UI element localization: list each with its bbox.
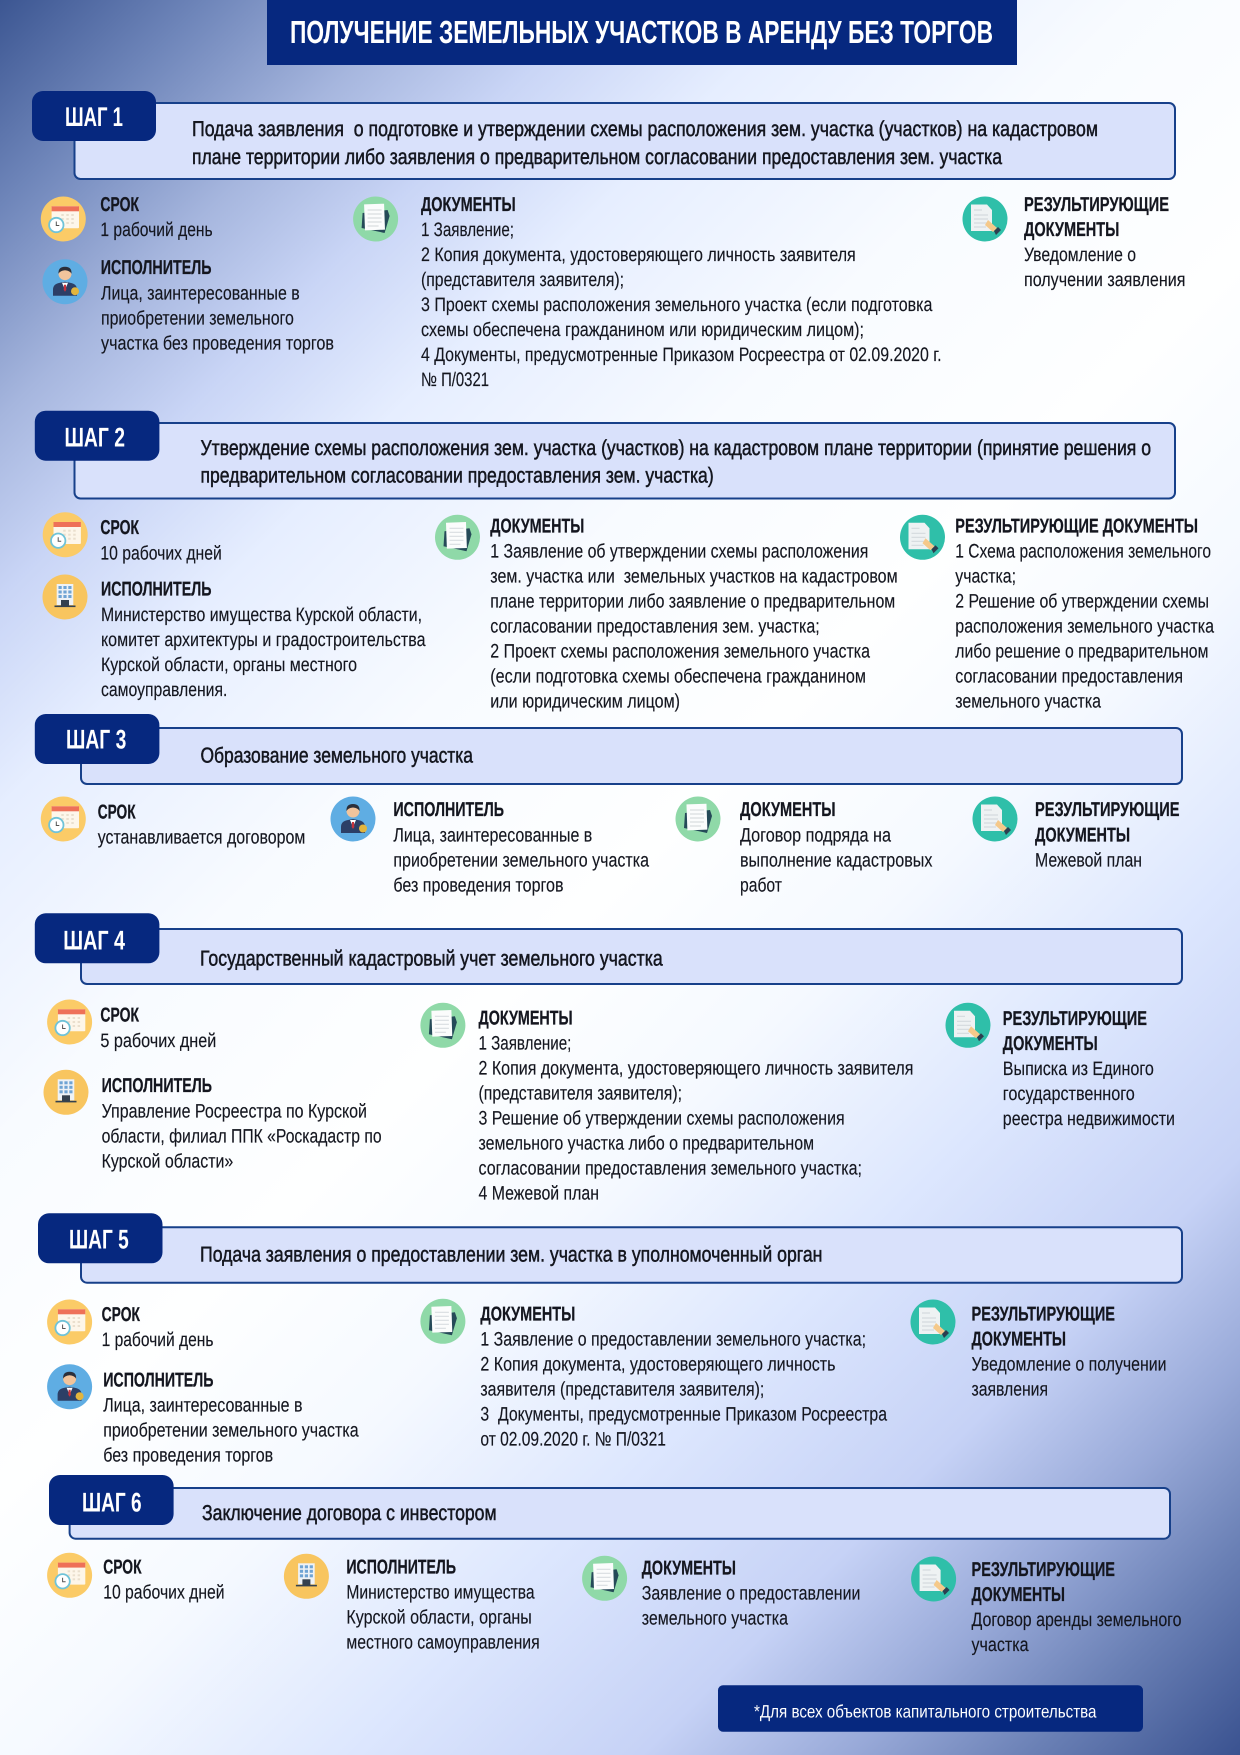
- documents list: зем. участка или земельных участков на кадастровом: [490, 566, 898, 588]
- term heading: СРОК: [103, 1556, 142, 1578]
- resulting heading: РЕЗУЛЬТИРУЮЩИЕ: [1003, 1008, 1147, 1030]
- resulting text: Договор аренды земельного: [972, 1609, 1182, 1631]
- executor text: [393, 825, 649, 897]
- executor text: без проведения торгов: [103, 1445, 273, 1467]
- icon: building: [42, 574, 88, 620]
- documents list: (если подготовка схемы обеспечена гражданином: [490, 666, 866, 688]
- panel: step 2: [35, 411, 1214, 713]
- step 5 bar: [81, 1227, 1182, 1283]
- resulting heading: ДОКУМЕНТЫ: [1024, 219, 1119, 241]
- documents list: 2 Проект схемы расположения земельного участка: [490, 641, 870, 663]
- step 3 bar: [81, 728, 1182, 784]
- icon: documents: [435, 515, 480, 560]
- executor text: приобретении земельного участка: [393, 850, 649, 872]
- step 4 executor: [44, 1070, 382, 1172]
- documents list: 4 Межевой план: [478, 1182, 599, 1204]
- documents list: 2 Копия документа, удостоверяющего личность: [480, 1354, 836, 1376]
- panel: step 1: [32, 91, 1185, 391]
- step 2 label: ШАГ 2: [64, 423, 125, 453]
- resulting text: [972, 1354, 1166, 1401]
- resulting heading: РЕЗУЛЬТИРУЮЩИЕ: [1035, 799, 1180, 821]
- documents list: согласовании предоставления зем. участка;: [490, 616, 820, 638]
- icon: resulting document: [910, 1300, 956, 1344]
- resulting text: земельного участка: [955, 691, 1101, 713]
- documents list: 3 Документы, предусмотренные Приказом Росреестра: [480, 1404, 887, 1426]
- step 4 title: Государственный кадастровый учет земельного участка: [200, 947, 663, 971]
- term text: 1 рабочий день: [100, 219, 213, 241]
- executor text: области, филиал ППК «Роскадастр по: [102, 1125, 382, 1147]
- resulting heading: ДОКУМЕНТЫ: [972, 1584, 1065, 1606]
- executor text: Министерство имущества Курской области,: [101, 604, 422, 626]
- step 6 label: ШАГ 6: [82, 1487, 142, 1517]
- executor heading: ИСПОЛНИТЕЛЬ: [101, 257, 212, 279]
- step 4 documents: [420, 1003, 913, 1204]
- executor text: Курской области»: [102, 1150, 233, 1172]
- title: [267, 0, 1017, 65]
- step 1 documents: [353, 194, 942, 391]
- step 5 title: Подача заявления о предоставлении зем. участка в уполномоченный орган: [200, 1243, 822, 1267]
- executor text: самоуправления.: [101, 679, 227, 701]
- panel: step 4: [35, 913, 1182, 1204]
- executor text: [101, 604, 426, 701]
- documents list: 2 Копия документа, удостоверяющего личность заявителя: [478, 1057, 913, 1079]
- icon: calendar: [43, 512, 88, 557]
- documents text: Договор подряда на: [740, 825, 891, 847]
- executor text: без проведения торгов: [393, 875, 564, 897]
- documents list: 1 Заявление;: [421, 219, 514, 241]
- executor text: [346, 1582, 540, 1654]
- executor text: местного самоуправления: [346, 1632, 540, 1654]
- step 5 documents: [420, 1299, 887, 1451]
- step 6 documents: [582, 1556, 860, 1630]
- resulting heading: [1035, 799, 1180, 847]
- resulting heading: ДОКУМЕНТЫ: [1003, 1033, 1098, 1055]
- term text: 1 рабочий день: [102, 1329, 214, 1351]
- icon: resulting document: [972, 796, 1018, 842]
- resulting text: участка: [972, 1634, 1029, 1656]
- icon: resulting document: [900, 515, 945, 560]
- resulting heading: РЕЗУЛЬТИРУЮЩИЕ: [972, 1304, 1115, 1326]
- documents text: [740, 825, 933, 897]
- step 4 tab: [35, 913, 159, 963]
- panel: step 3: [35, 714, 1182, 897]
- icon: documents: [676, 796, 720, 842]
- resulting text: участка;: [955, 566, 1016, 588]
- resulting heading: РЕЗУЛЬТИРУЮЩИЕ: [972, 1559, 1115, 1581]
- resulting text: [955, 541, 1214, 713]
- resulting text: [972, 1609, 1182, 1656]
- executor text: [101, 283, 334, 355]
- documents heading: ДОКУМЕНТЫ: [490, 516, 584, 538]
- documents list: 4 Документы, предусмотренные Приказом Росреестра от 02.09.2020 г.: [421, 344, 942, 366]
- executor heading: ИСПОЛНИТЕЛЬ: [101, 579, 212, 601]
- icon: building: [284, 1554, 329, 1599]
- icon: person: [42, 259, 88, 304]
- panel: step 5: [38, 1213, 1182, 1467]
- documents heading: ДОКУМЕНТЫ: [740, 799, 836, 821]
- documents text: земельного участка: [642, 1608, 788, 1630]
- icon: calendar: [47, 1000, 92, 1044]
- executor text: [102, 1100, 382, 1172]
- step 6 bar: [70, 1488, 1170, 1539]
- icon: person: [47, 1364, 92, 1409]
- executor text: Управление Росреестра по Курской: [102, 1100, 367, 1122]
- executor text: Министерство имущества: [346, 1582, 535, 1604]
- icon: calendar: [47, 1300, 92, 1344]
- step 6 executor: [284, 1554, 540, 1654]
- icon: person: [330, 796, 376, 842]
- step 5 executor: [47, 1364, 359, 1467]
- resulting text: [1003, 1058, 1175, 1130]
- documents heading: ДОКУМЕНТЫ: [478, 1007, 573, 1029]
- step 4 label: ШАГ 4: [63, 925, 125, 955]
- step 1 label: ШАГ 1: [65, 102, 123, 132]
- icon: documents: [582, 1556, 627, 1601]
- documents list: 1 Заявление;: [478, 1032, 571, 1054]
- footnote: *Для всех объектов капитального строительства: [754, 1701, 1097, 1721]
- resulting text: [1024, 244, 1185, 291]
- resulting text: Выписка из Единого: [1003, 1058, 1154, 1080]
- panel: step 6: [47, 1475, 1182, 1656]
- step 2 term: [43, 512, 222, 564]
- documents text: Заявление о предоставлении: [642, 1583, 860, 1605]
- step 3 tab: [35, 714, 159, 764]
- step 2 resulting documents: [900, 515, 1214, 713]
- icon: documents: [353, 196, 398, 242]
- step 1 title: [192, 117, 1098, 169]
- resulting text: государственного: [1003, 1083, 1135, 1105]
- executor text: Курской области, органы: [346, 1607, 532, 1629]
- step 1 term: [41, 194, 213, 242]
- documents text: выполнение кадастровых: [740, 850, 933, 872]
- executor heading: ИСПОЛНИТЕЛЬ: [346, 1556, 456, 1578]
- documents list: (представителя заявителя);: [478, 1082, 682, 1104]
- icon: documents: [420, 1299, 465, 1344]
- documents list: 1 Заявление о предоставлении земельного участка;: [480, 1329, 866, 1351]
- resulting text: Уведомление о получении: [972, 1354, 1166, 1376]
- documents list: земельного участка либо о предварительном: [478, 1132, 814, 1154]
- step 2 documents: [435, 515, 898, 713]
- step 4 term: [47, 1000, 216, 1052]
- step 4 bar: [81, 929, 1182, 984]
- documents heading: ДОКУМЕНТЫ: [421, 194, 516, 216]
- step 2 bar: [74, 423, 1175, 498]
- footnote: [718, 1685, 1143, 1732]
- executor text: приобретении земельного участка: [103, 1420, 359, 1442]
- step 3 term: [41, 796, 305, 848]
- step 2 executor: [42, 574, 426, 701]
- documents list: 3 Проект схемы расположения земельного участка (если подготовка: [421, 294, 933, 316]
- documents list: 2 Копия документа, удостоверяющего личность заявителя: [421, 244, 856, 266]
- resulting text: Уведомление о: [1024, 244, 1136, 266]
- step 2 title: предварительном согласовании предоставления зем. участка): [200, 464, 714, 488]
- documents list: [478, 1032, 913, 1204]
- step 3 resulting documents: [972, 796, 1180, 872]
- icon: resulting document: [962, 196, 1008, 242]
- term text: устанавливается договором: [98, 826, 305, 848]
- step 2 title: [200, 436, 1151, 488]
- documents list: 1 Заявление об утверждении схемы расположения: [490, 541, 868, 563]
- step 1 bar: [74, 103, 1175, 179]
- step 1 tab: [32, 91, 156, 141]
- documents list: схемы обеспечена гражданином или юридическим лицом);: [421, 319, 864, 341]
- documents list: [490, 541, 898, 713]
- documents list: (представителя заявителя);: [421, 269, 624, 291]
- resulting text: получении заявления: [1024, 269, 1185, 291]
- step 1 title: плане территории либо заявления о предварительном согласовании предоставления зем. участка: [192, 145, 1002, 169]
- executor text: Лица, заинтересованные в: [103, 1395, 302, 1417]
- executor text: участка без проведения торгов: [101, 333, 334, 355]
- step 5 term: [47, 1300, 213, 1351]
- icon: resulting document: [911, 1556, 956, 1602]
- term text: 10 рабочих дней: [103, 1582, 225, 1604]
- term heading: СРОК: [98, 801, 136, 823]
- documents list: плане территории либо заявление о предварительном: [490, 591, 895, 613]
- executor text: [103, 1395, 359, 1467]
- documents heading: ДОКУМЕНТЫ: [480, 1304, 575, 1326]
- executor text: Лица, заинтересованные в: [101, 283, 300, 305]
- documents list: согласовании предоставления земельного участка;: [478, 1157, 862, 1179]
- documents list: от 02.09.2020 г. № П/0321: [480, 1429, 666, 1451]
- term text: 10 рабочих дней: [100, 542, 222, 564]
- executor heading: ИСПОЛНИТЕЛЬ: [103, 1370, 214, 1392]
- executor text: приобретении земельного: [101, 308, 294, 330]
- step 1 executor: [42, 257, 334, 355]
- documents list: заявителя (представителя заявителя);: [480, 1379, 764, 1401]
- documents list: или юридическим лицом): [490, 691, 680, 713]
- step 2 tab: [35, 411, 159, 461]
- resulting heading: ДОКУМЕНТЫ: [972, 1329, 1066, 1351]
- icon: building: [44, 1070, 88, 1115]
- step 3 title: Образование земельного участка: [200, 743, 473, 767]
- executor text: комитет архитектуры и градостроительства: [101, 629, 426, 651]
- term heading: СРОК: [100, 1005, 140, 1027]
- resulting heading: [972, 1559, 1115, 1606]
- step 3 label: ШАГ 3: [66, 725, 126, 755]
- executor heading: ИСПОЛНИТЕЛЬ: [102, 1075, 212, 1097]
- resulting text: заявления: [972, 1379, 1048, 1401]
- term heading: СРОК: [102, 1304, 141, 1326]
- icon: calendar: [41, 196, 86, 242]
- step 3 executor: [330, 796, 649, 897]
- documents list: [421, 219, 942, 391]
- icon: resulting document: [946, 1003, 990, 1048]
- documents text: работ: [740, 875, 782, 897]
- executor heading: ИСПОЛНИТЕЛЬ: [393, 799, 504, 821]
- resulting heading: [972, 1304, 1115, 1351]
- resulting heading: РЕЗУЛЬТИРУЮЩИЕ: [1024, 194, 1169, 216]
- step 6 tab: [49, 1475, 174, 1525]
- resulting text: Межевой план: [1035, 850, 1142, 872]
- icon: calendar: [47, 1553, 92, 1598]
- documents text: [642, 1583, 860, 1630]
- step 6 title: Заключение договора с инвестором: [202, 1501, 497, 1525]
- resulting text: согласовании предоставления: [955, 666, 1183, 688]
- documents list: [480, 1329, 887, 1451]
- term heading: СРОК: [100, 517, 140, 539]
- step 4 resulting documents: [946, 1003, 1175, 1130]
- step 5 label: ШАГ 5: [69, 1224, 129, 1254]
- resulting heading: ДОКУМЕНТЫ: [1035, 825, 1130, 847]
- step 3 documents: [676, 796, 933, 897]
- documents heading: ДОКУМЕНТЫ: [642, 1558, 736, 1580]
- step 6 resulting documents: [911, 1556, 1182, 1656]
- documents list: № П/0321: [421, 369, 489, 391]
- step 1 resulting documents: [962, 194, 1185, 291]
- resulting heading: [1003, 1008, 1147, 1055]
- step 5 resulting documents: [910, 1300, 1166, 1401]
- resulting heading: [1024, 194, 1169, 241]
- icon: calendar: [41, 796, 86, 842]
- step 5 tab: [38, 1213, 162, 1263]
- step 6 term: [47, 1553, 225, 1604]
- icon: documents: [420, 1003, 465, 1048]
- documents list: 3 Решение об утверждении схемы расположения: [478, 1107, 845, 1129]
- term text: 5 рабочих дней: [100, 1030, 216, 1052]
- executor text: Лица, заинтересованные в: [393, 825, 592, 847]
- resulting text: реестра недвижимости: [1003, 1108, 1175, 1130]
- executor text: Курской области, органы местного: [101, 654, 357, 676]
- term heading: СРОК: [100, 194, 140, 216]
